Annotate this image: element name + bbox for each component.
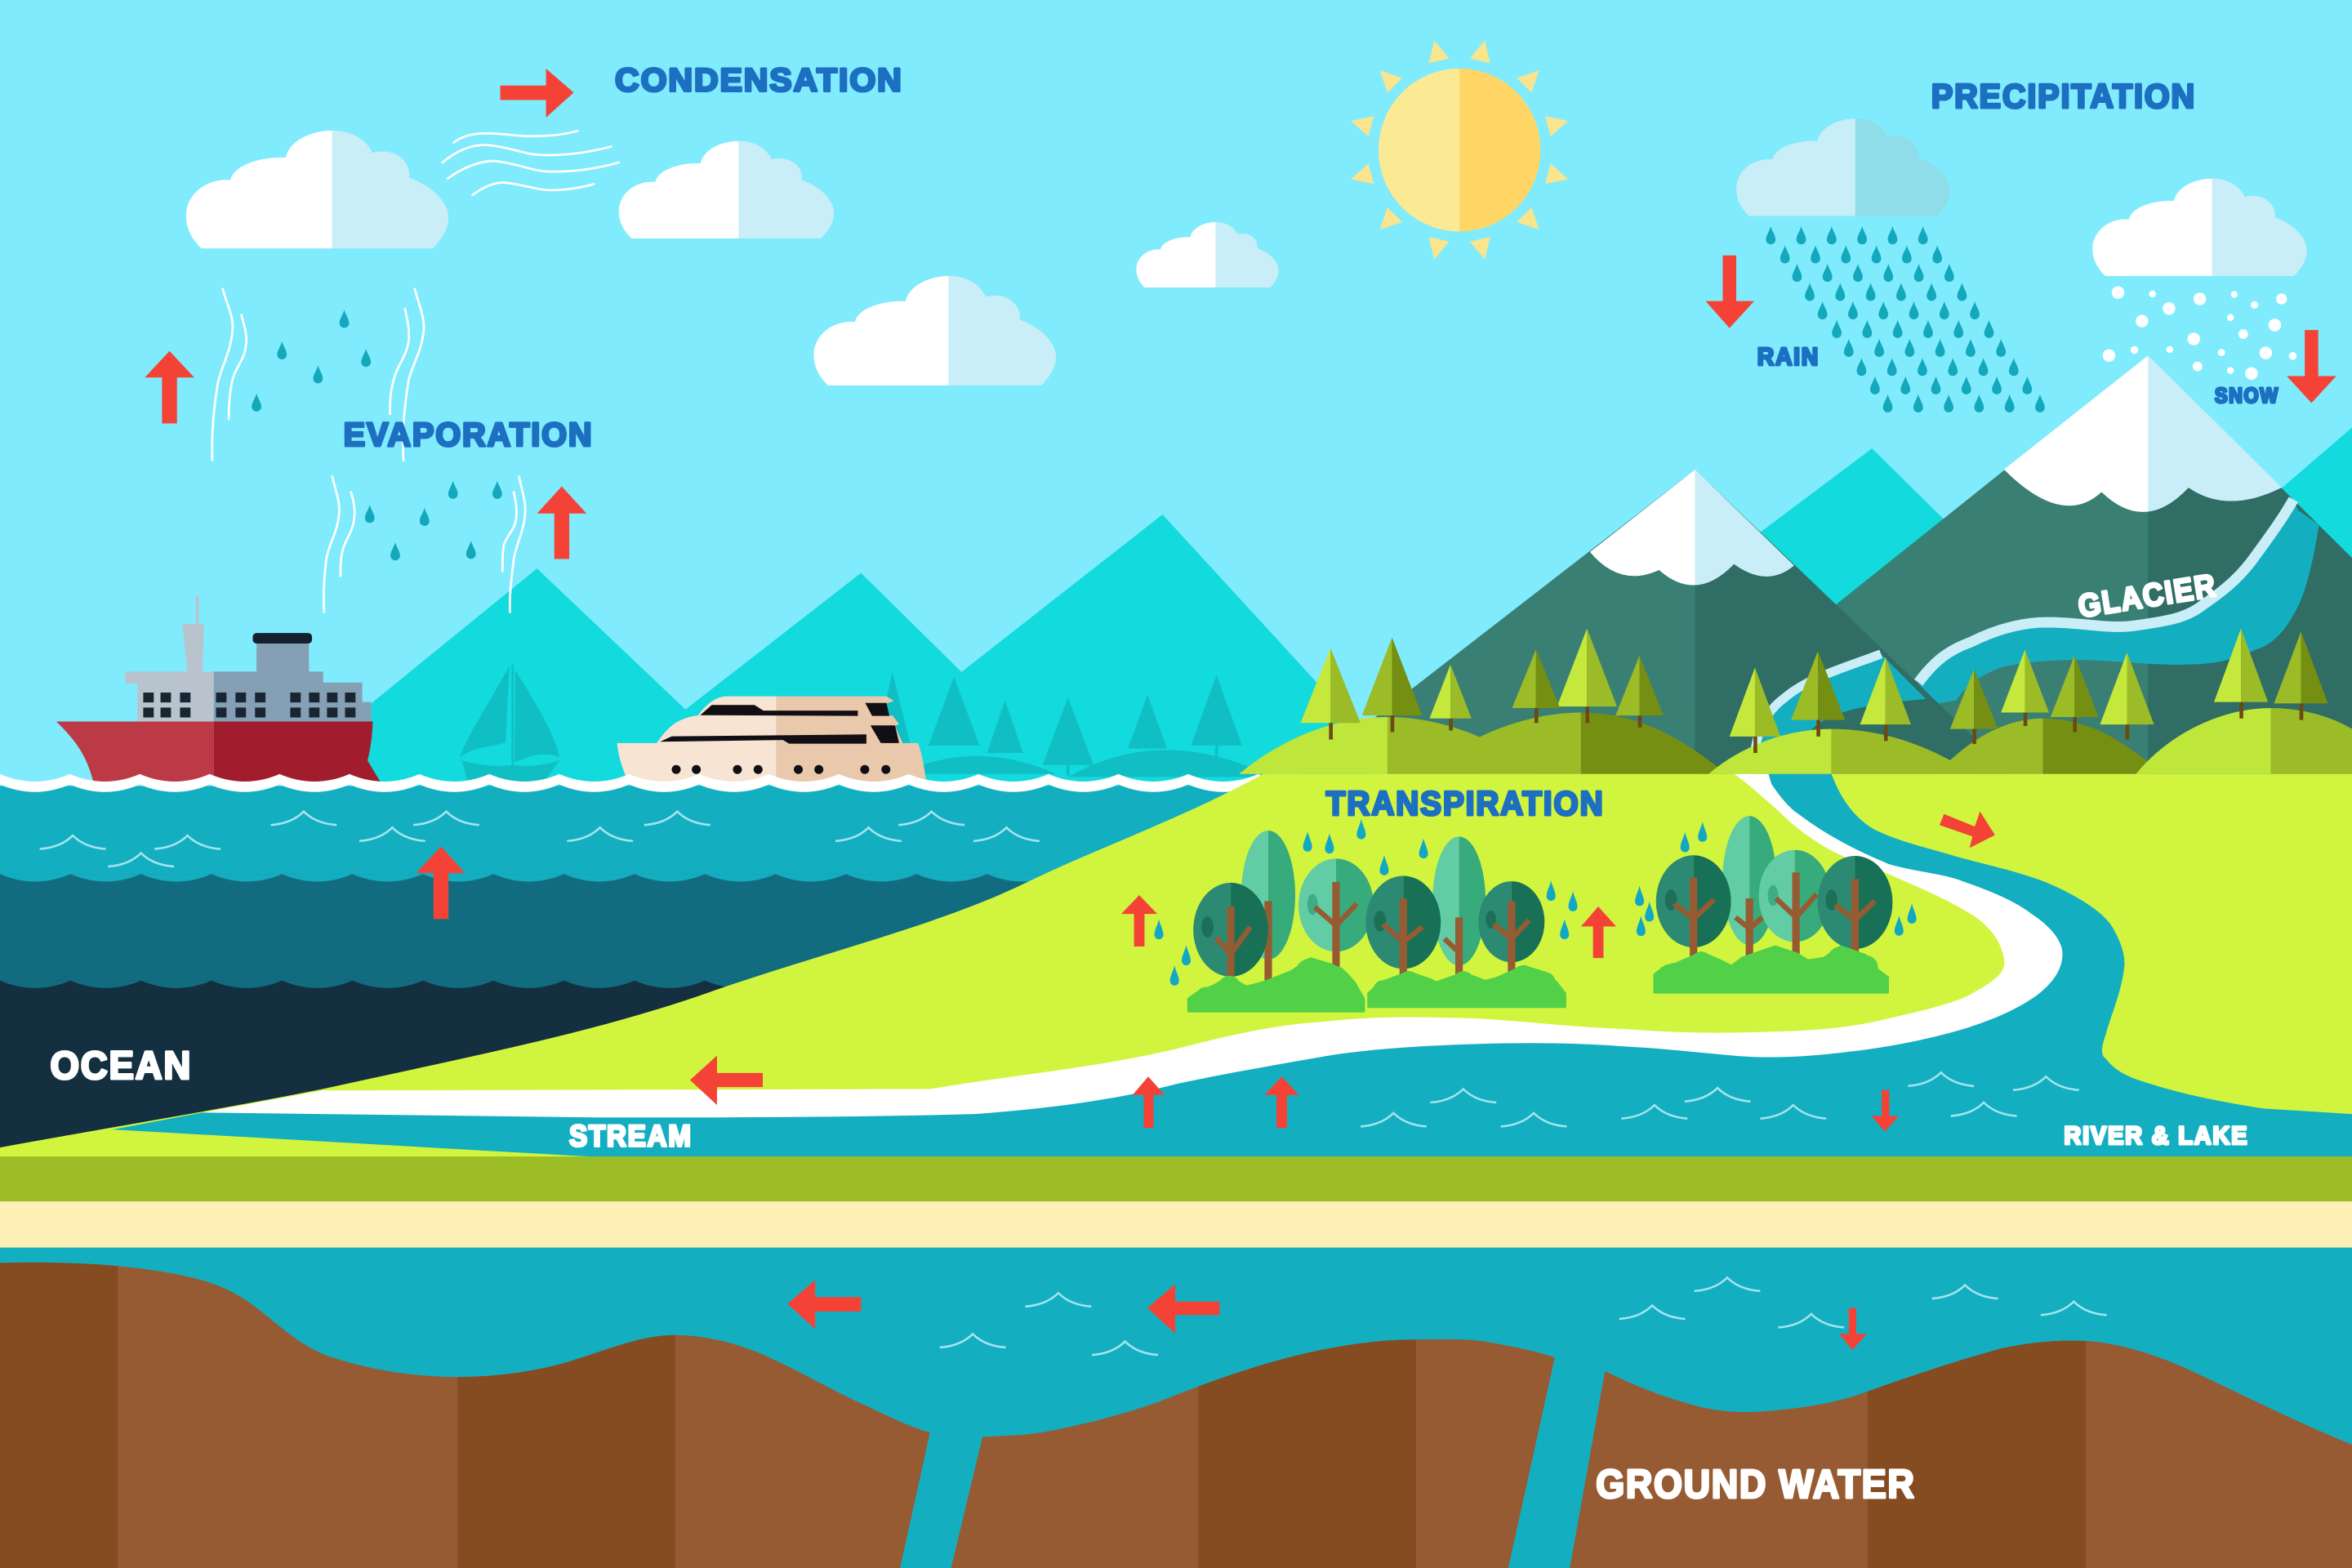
transpiration tree group left <box>1193 831 1544 982</box>
arrow: river up 2 <box>1264 1076 1299 1128</box>
condensation wind lines <box>443 131 619 195</box>
evaporation vapour lines lower <box>323 477 525 612</box>
bushes <box>1189 947 1887 1011</box>
transpiration droplets <box>1155 819 1917 986</box>
label: ocean: OCEAN <box>51 1045 192 1088</box>
white wave crest <box>0 771 1320 801</box>
bedrock soil <box>0 1263 2352 1568</box>
label: transpiration: TRANSPIRATION <box>1326 785 1604 822</box>
arrow: transpiration up left <box>1121 895 1157 947</box>
transpiration tree group right <box>1656 816 1892 959</box>
arrow: evaporation up left <box>145 351 194 424</box>
rain droplets <box>1766 226 2045 412</box>
sun <box>1348 38 1571 262</box>
ocean layers <box>0 786 1350 1156</box>
arrow: snow down <box>2287 330 2336 403</box>
arrow: groundwater down <box>1839 1308 1867 1350</box>
snow cloud <box>2092 179 2307 276</box>
conifer trees <box>1300 629 2328 753</box>
groundwater <box>0 1248 2352 1568</box>
white stream bank <box>203 774 2063 1117</box>
cloud 3 <box>813 276 1056 385</box>
river ripples <box>1361 1072 2079 1126</box>
cargo ship <box>56 595 381 783</box>
label: evaporation: EVAPORATION <box>344 416 593 453</box>
green hills <box>1239 708 2352 774</box>
cloud 1 <box>186 131 448 248</box>
groundwater ripples <box>940 1277 2107 1355</box>
rain cloud <box>1736 118 1950 216</box>
distant teal mountains left <box>360 514 1365 787</box>
label: rain: RAIN <box>1757 344 1820 371</box>
arrow: river up 1 <box>1133 1076 1165 1128</box>
label: precipitation: PRECIPITATION <box>1931 78 2196 115</box>
faded sailboat <box>460 665 559 783</box>
label: glacier: GLACIER <box>2076 568 2219 625</box>
arrow: lake down <box>1871 1090 1899 1131</box>
evaporation droplets <box>252 310 502 560</box>
arrow: stream left <box>690 1056 763 1105</box>
cloud 4 small <box>1136 222 1279 287</box>
arrow: condensation right <box>501 69 574 118</box>
snowflakes <box>2103 286 2296 380</box>
glacier upper band <box>1918 500 2319 705</box>
label: condensation: CONDENSATION <box>615 63 903 99</box>
glacier lower band <box>1752 654 1926 774</box>
arrow: river diagonal <box>1940 812 1995 848</box>
evaporation vapour lines upper <box>212 289 424 461</box>
label: river and lake: RIVER & LAKE <box>2064 1121 2248 1150</box>
ocean ripples <box>40 812 1040 866</box>
arrow: transpiration up right <box>1581 906 1616 958</box>
sand layer <box>0 1201 2352 1248</box>
arrow: evaporation up right <box>537 487 586 559</box>
yacht <box>617 697 927 783</box>
label: snow: SNOW <box>2215 385 2279 408</box>
river and lake <box>113 774 2352 1158</box>
grass soil layer <box>0 1156 2352 1201</box>
arrow: rain down <box>1705 256 1754 328</box>
green land <box>0 774 2352 1158</box>
label: stream: STREAM <box>569 1120 693 1153</box>
cloud 2 <box>619 141 834 238</box>
large snow mountain <box>1836 355 2352 774</box>
distant teal mountains right <box>1740 427 2352 630</box>
arrow: groundwater left 2 <box>1147 1284 1219 1334</box>
label: ground water: GROUND WATER <box>1596 1463 1916 1507</box>
arrow: ocean up <box>416 846 465 919</box>
arrow: groundwater left 1 <box>787 1280 861 1329</box>
front snow mountain <box>1302 470 2011 774</box>
faded background trees <box>876 672 1272 777</box>
